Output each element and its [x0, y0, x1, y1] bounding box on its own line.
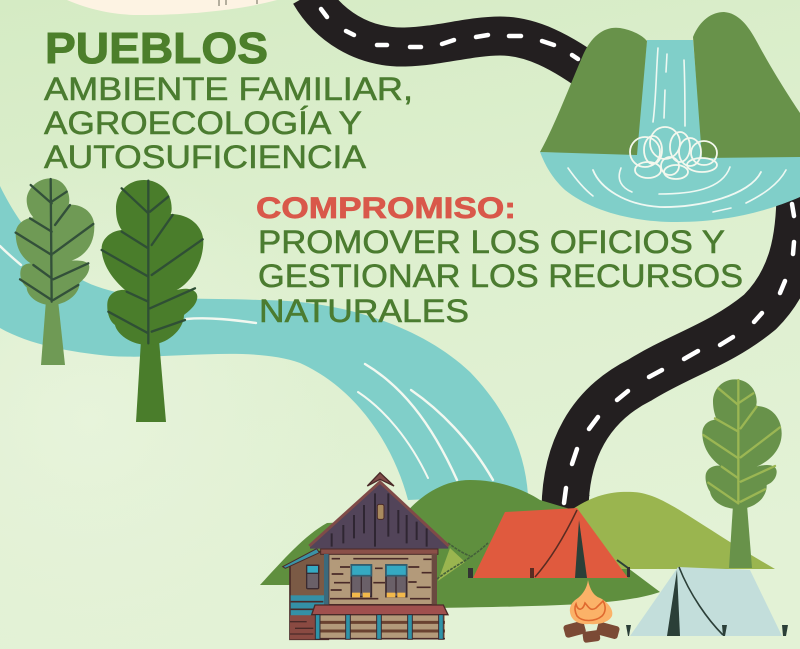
cabin side annex: [290, 552, 328, 639]
subtitle: ambiente familiar: AUTOSUFICIENCIA: [44, 139, 367, 175]
subtitle: ambiente familiar: AMBIENTE FAMILIAR,: [44, 71, 413, 107]
cabin log wall: [328, 553, 436, 605]
hills behind camp: [260, 480, 775, 608]
text: compromiso body: PROMOVER LOS OFICIOS Y: [258, 224, 725, 260]
tree: right with light veins: [702, 379, 782, 568]
tree: left light green: [16, 178, 94, 365]
waterfall stream: [636, 40, 703, 158]
text: compromiso body: NATURALES: [259, 293, 469, 329]
subtitle: ambiente familiar: [44, 71, 413, 175]
cream blob at top: [67, 0, 277, 15]
left mountain: [540, 28, 647, 155]
red tent: [468, 508, 630, 578]
river: [0, 186, 528, 500]
foam rocks: [630, 127, 717, 179]
light blue tent: [626, 567, 788, 636]
cabin porch: [315, 615, 445, 639]
right mountain: [693, 12, 800, 158]
heading: compromiso: COMPROMISO:: [256, 192, 516, 225]
road: upper section: [310, 0, 600, 80]
text: compromiso body: GESTIONAR LOS RECURSOS: [258, 258, 743, 294]
road: lower section: [542, 190, 800, 512]
vine between house and tent: [437, 543, 488, 579]
subtitle: ambiente familiar: AGROECOLOGÍA Y: [44, 105, 362, 141]
pool of water: [540, 152, 800, 222]
log cabin: [283, 473, 449, 639]
tree: dark green: [102, 180, 203, 422]
title: Pueblos: PUEBLOS: [45, 24, 268, 73]
waterfall streaks: [568, 48, 786, 212]
cabin gable roof: [310, 483, 448, 549]
text: compromiso body: [258, 224, 743, 329]
campfire: [563, 580, 620, 643]
cabin windows: [351, 565, 407, 597]
waterfall and mountains: [540, 12, 800, 222]
